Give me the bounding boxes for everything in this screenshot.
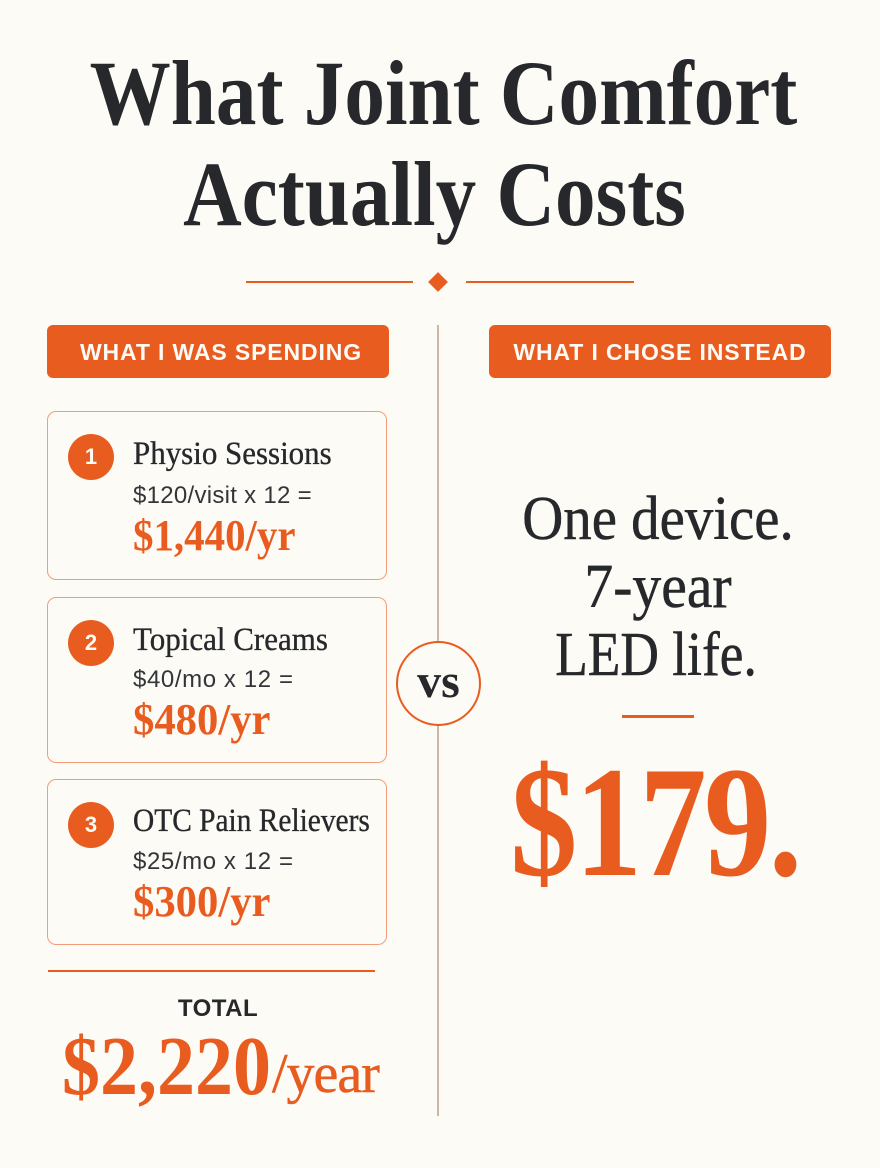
vs badge — [396, 641, 481, 726]
title: Actually Costs — [183, 143, 686, 245]
total value: $2,220 — [62, 1020, 271, 1113]
number 1: 1 — [85, 444, 97, 469]
card: otc pain relievers — [47, 779, 387, 945]
card: physio sessions — [47, 411, 387, 580]
right statement — [522, 485, 794, 689]
title — [90, 42, 797, 245]
number 2: 2 — [85, 630, 97, 655]
total value: /year — [272, 1043, 379, 1105]
title divider — [246, 272, 634, 292]
card title: Physio Sessions — [133, 436, 332, 472]
vs badge: vs — [417, 655, 460, 708]
right statement: 7-year — [584, 553, 732, 621]
left heading: WHAT I WAS SPENDING — [80, 339, 362, 365]
right short rule — [622, 715, 694, 718]
left heading — [47, 325, 389, 378]
card formula: $25/mo x 12 = — [133, 848, 294, 875]
card formula: $120/visit x 12 = — [133, 482, 312, 509]
number 3 — [68, 802, 114, 848]
card value: $300/yr — [133, 877, 271, 926]
total rule — [48, 970, 375, 972]
card title: OTC Pain Relievers — [133, 803, 370, 839]
right price: $179. — [510, 735, 800, 910]
card value: $480/yr — [133, 695, 271, 744]
title: What Joint Comfort — [90, 42, 797, 144]
card: topical creams — [47, 597, 387, 763]
right statement: LED life. — [555, 621, 757, 689]
right heading — [489, 325, 831, 378]
right statement: One device. — [522, 485, 794, 553]
number 3: 3 — [85, 812, 97, 837]
card value: $1,440/yr — [133, 511, 296, 560]
right heading: WHAT I CHOSE INSTEAD — [513, 339, 807, 365]
total label: TOTAL — [178, 995, 258, 1022]
center vertical divider — [437, 325, 439, 1116]
number 2 — [68, 620, 114, 666]
card formula: $40/mo x 12 = — [133, 666, 294, 693]
total value — [62, 1020, 380, 1113]
card title: Topical Creams — [133, 622, 328, 658]
number 1 — [68, 434, 114, 480]
